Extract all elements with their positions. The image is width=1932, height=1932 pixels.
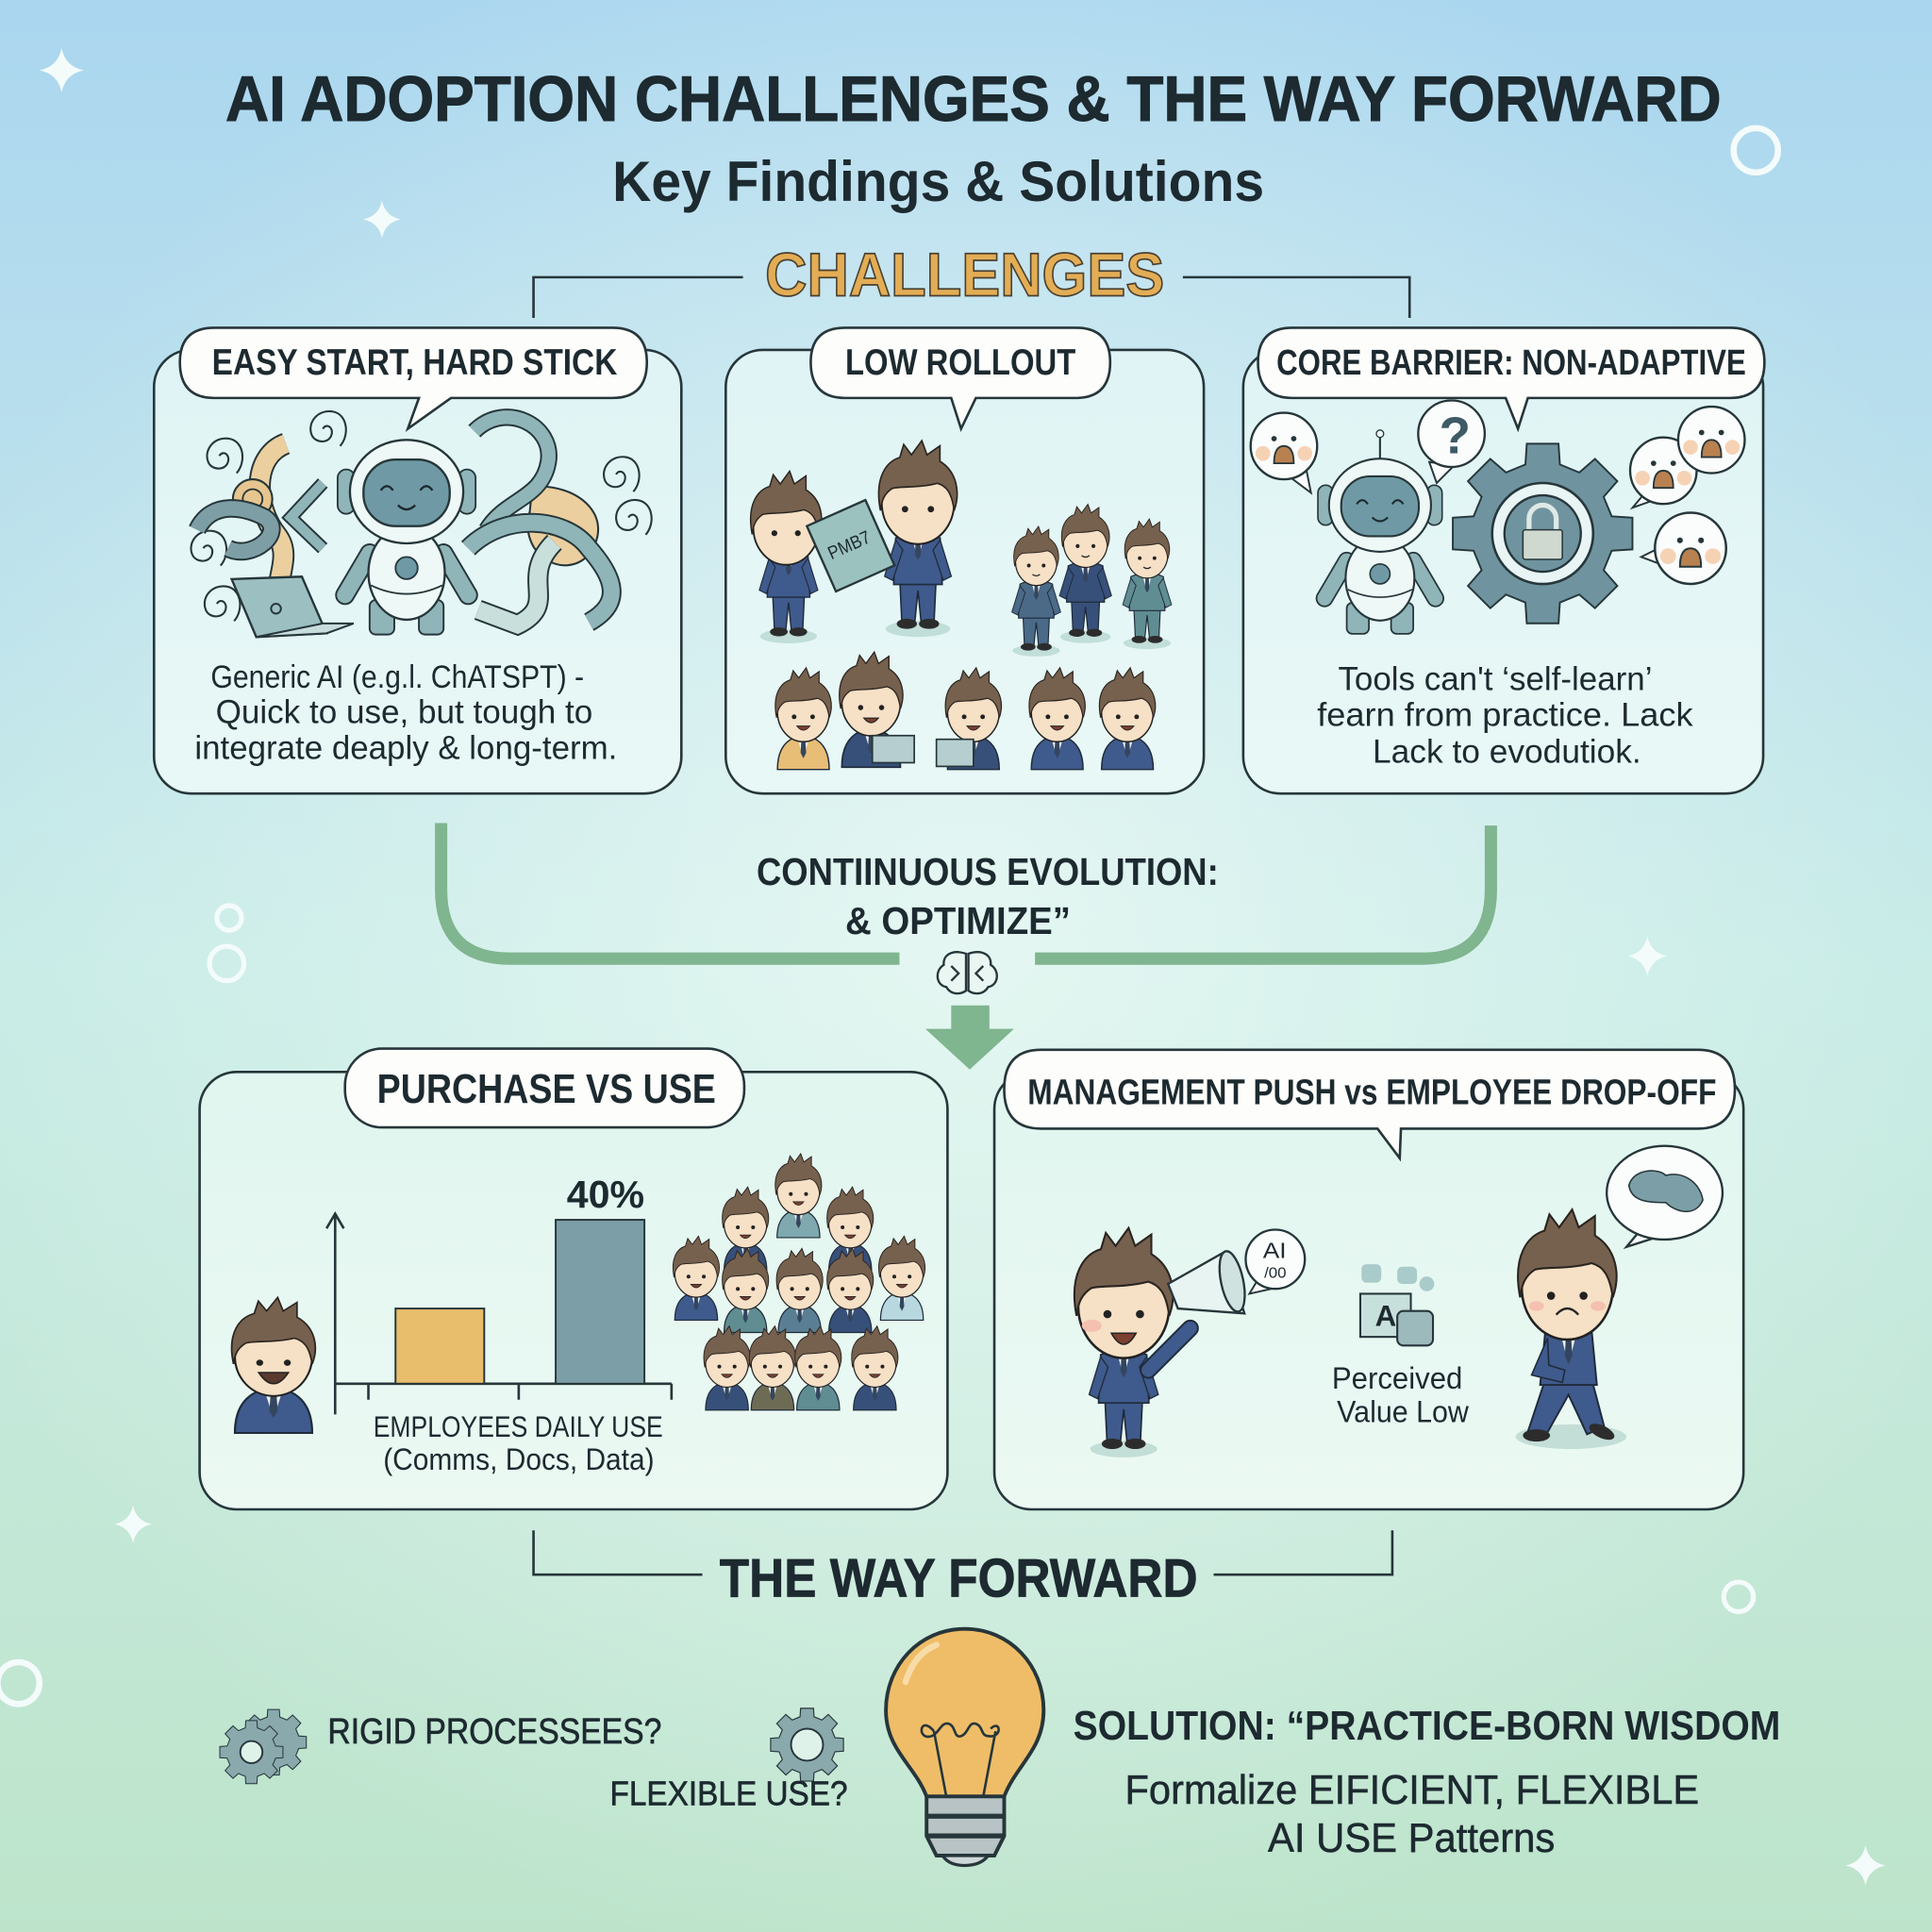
bubble: AI: /00 [1264,1265,1287,1281]
bubble: low rollout heading: LOW ROLLOUT [845,342,1075,383]
subtitle: Key Findings & Solutions [612,150,1264,213]
text: solution description: Formalize EIFICIENT, FLEXIBLE [1124,1768,1699,1813]
bubble: purchase vs use heading: PURCHASE VS USE [377,1067,716,1112]
bubble: management push heading [1004,1050,1735,1158]
bubble: easy start heading: EASY START, HARD STICK [212,342,617,383]
text: chart caption: (Comms, Docs, Data) [383,1441,655,1476]
text: easy start description: Quick to use, but tough to [216,694,592,731]
icon: AI tool [1360,1264,1434,1345]
bubble: thought cloud [1607,1146,1723,1247]
heading: challenges with connector [534,240,1409,318]
heading: challenges with connector: CHALLENGES [765,240,1164,308]
illustration: robot tangled in tentacles [191,411,652,637]
text: perceived value low: Perceived [1332,1360,1462,1395]
text: continuous evolution [757,850,1219,942]
text: core barrier description [1317,660,1693,770]
icon: single gear [771,1708,843,1781]
bubble: purchase vs use heading [345,1049,744,1127]
value label: 40% [567,1173,644,1216]
bubble: AI [1245,1230,1305,1293]
text: solution description: AI USE Patterns [1268,1816,1555,1861]
illustration: crowd of employees [673,1154,925,1410]
text: solution heading: SOLUTION: “PRACTICE-BORN WISDOM [1074,1704,1780,1749]
panel: easy start, hard stick [154,327,681,793]
icon: gear with lock [1453,443,1632,624]
icon: speech bubbles with worried faces [1251,400,1744,584]
text: chart caption: EMPLOYEES DAILY USE [374,1410,663,1443]
text: continuous evolution: CONTIINUOUS EVOLUTION: [757,850,1219,893]
bubble: core barrier heading [1258,327,1764,429]
text: core barrier description: Lack to evodutiok. [1373,733,1641,770]
icon: brain [938,952,997,993]
icon: laptop [232,576,354,637]
text: easy start description: integrate deaply & long-term. [194,730,617,767]
icon: robot [338,440,475,635]
text: core barrier description: Tools can't ‘self-learn’ [1338,660,1653,697]
illustration: employee walking away [1516,1209,1626,1449]
bubble: easy start heading [180,327,647,429]
panel: purchase vs use [200,1049,947,1509]
text: easy start description: Generic AI (e.g.l. ChATSPT) - [210,659,584,695]
text: easy start description [194,659,617,767]
icon: double gears [220,1709,307,1784]
text: continuous evolution: & OPTIMIZE” [845,899,1071,942]
icon: smiling manager [232,1297,315,1433]
bubble: AI: AI [1263,1239,1287,1263]
icon: light bulb [886,1629,1043,1865]
text: core barrier description: fearn from practice. Lack [1317,696,1693,733]
heading: the way forward with connector [534,1530,1392,1609]
illustration: row of five employees [775,652,1156,770]
icon: AI tool: A [1375,1299,1396,1332]
text: perceived value low: Value Low [1337,1393,1469,1428]
bubble: core barrier heading: CORE BARRIER: NON-ADAPTIVE [1276,343,1746,383]
illustration: two managers with tablet: PMB7 [824,527,874,564]
illustration: two managers with tablet [751,441,958,643]
bracket: continuous evolution [441,823,1491,993]
illustration: manager with megaphone [1074,1228,1305,1457]
panel: low rollout [725,327,1204,793]
text: chart caption [374,1410,663,1476]
heading: the way forward with connector: THE WAY FORWARD [720,1549,1198,1609]
illustration: small group of three [1012,505,1172,657]
icon: speech bubbles with worried faces: ? [1440,407,1471,465]
bubble: management push heading: MANAGEMENT PUSH vs EMPLOYEE DROP-OFF [1027,1073,1716,1112]
bar: purchase [395,1308,484,1384]
text: solution description [1124,1768,1699,1861]
bubble: low rollout heading [810,327,1110,429]
text: rigid processes: RIGID PROCESSEES? [327,1712,661,1752]
bar: use [556,1220,644,1384]
arrow: down [925,1006,1014,1070]
icon: robot with antenna [1318,430,1442,634]
text: perceived value low [1332,1360,1469,1428]
panel: core barrier [1243,327,1764,793]
bar chart [326,1173,672,1414]
title: AI ADOPTION CHALLENGES & THE WAY FORWARD [225,64,1722,135]
icon: megaphone [1168,1249,1249,1314]
panel: management push vs employee drop-off [994,1050,1743,1509]
text: flexible use: FLEXIBLE USE? [610,1774,848,1812]
